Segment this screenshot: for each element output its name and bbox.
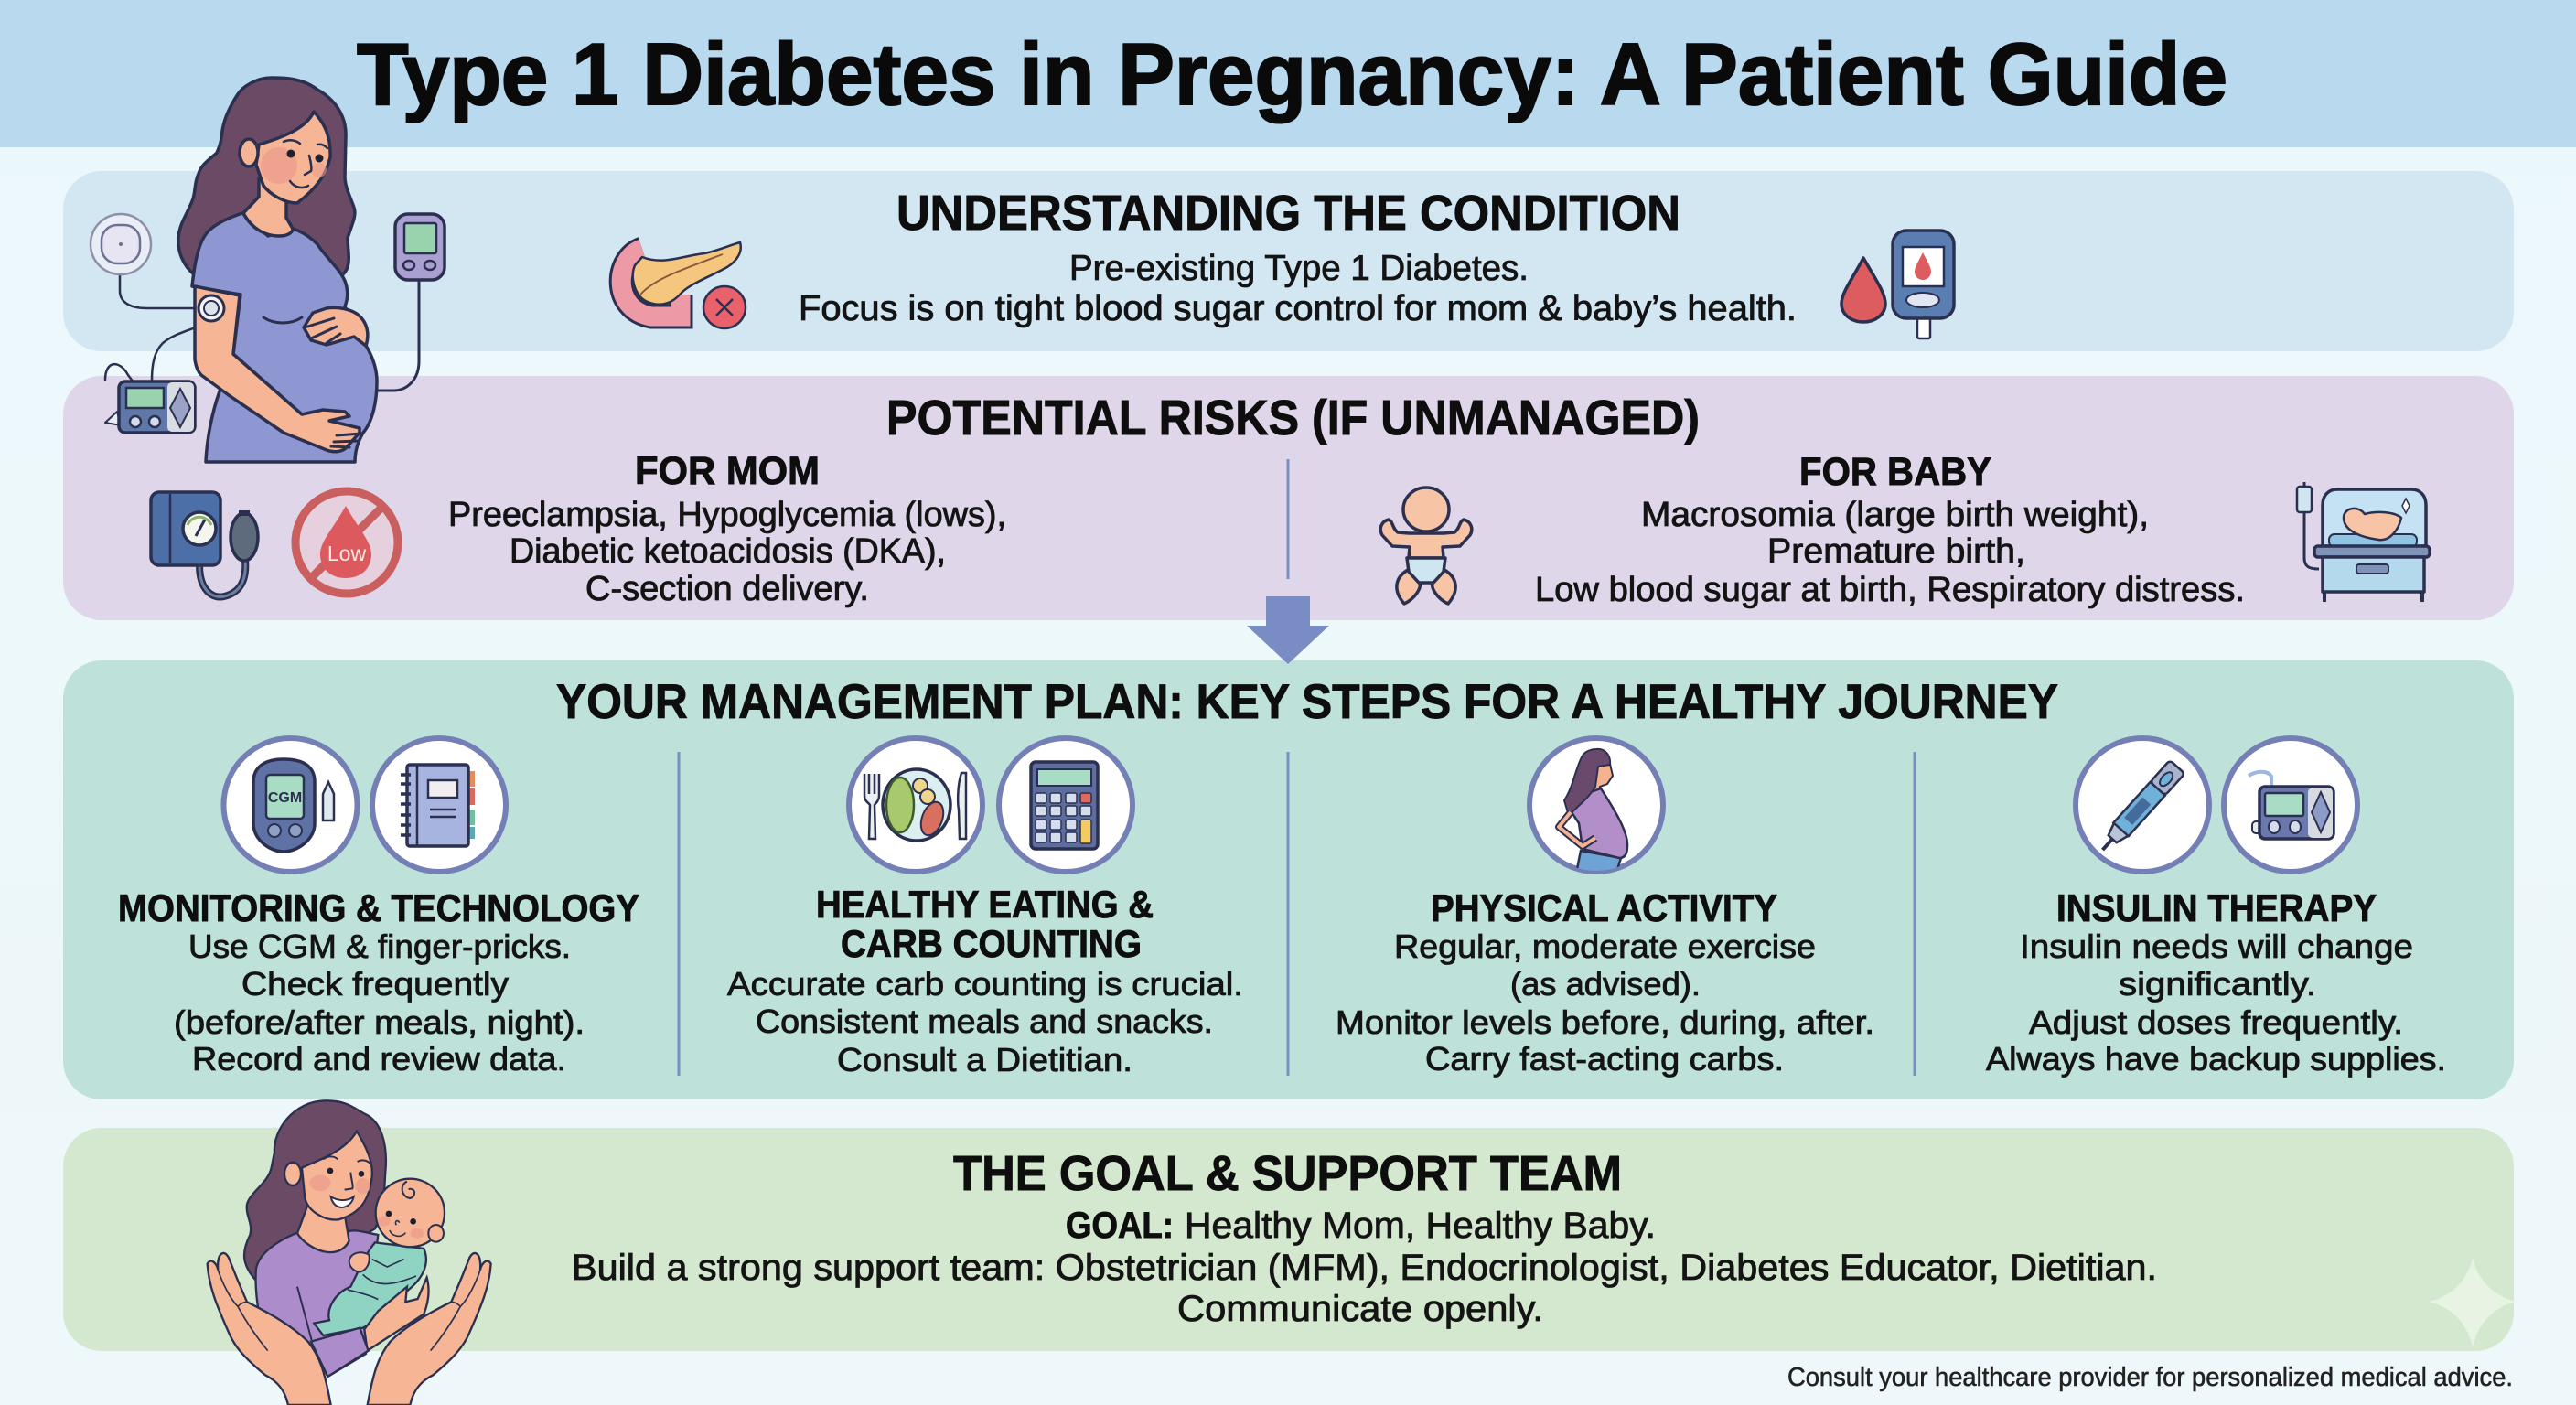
column: healthy eating and carb counting (727, 883, 1243, 1078)
arm sensor (199, 295, 224, 321)
baby body (314, 1242, 426, 1335)
column: healthy eating and carb counting: Consult a Dietitian. (837, 1041, 1132, 1078)
text: goal and team: GOAL: (1066, 1206, 1174, 1246)
mother forearm (364, 1278, 429, 1351)
icon: logbook (372, 738, 506, 872)
baby head (376, 1179, 445, 1247)
left supporting hand (208, 1253, 331, 1405)
icon label: CGM: CGM (268, 790, 302, 806)
icon: insulin pen (2076, 738, 2209, 872)
mother hair (244, 1100, 386, 1281)
text: goal and team (572, 1206, 2157, 1329)
text: goal and team: Build a strong support team: Obstetrician (MFM), Endocrinologist, Diabetes Educator, Dietitian. (572, 1248, 2157, 1288)
mother face (284, 1132, 372, 1219)
device: round sensor (91, 214, 208, 381)
heading: management plan: YOUR MANAGEMENT PLAN: KEY STEPS FOR A HEALTHY JOURNEY (556, 675, 2058, 729)
column: physical activity: Regular, moderate exercise (1394, 928, 1816, 965)
baby hand (349, 1252, 370, 1272)
column: monitoring and technology (118, 886, 639, 1078)
column: physical activity (1336, 886, 1874, 1078)
icon: baby (1380, 488, 1472, 604)
text: risks for baby: Premature birth, (1767, 532, 2025, 571)
column: physical activity: PHYSICAL ACTIVITY (1431, 886, 1777, 929)
illustration: pregnant woman with devices (91, 78, 445, 462)
subheading: for mom: FOR MOM (635, 449, 820, 493)
illustration: mother with baby held by hands (208, 1100, 491, 1405)
text: risks for mom (448, 496, 1006, 608)
mother sweater (256, 1230, 378, 1377)
panel: goal and support team (63, 1128, 2516, 1351)
icon: pregnant woman exercising (1530, 738, 1663, 878)
header band (0, 0, 2576, 147)
column: monitoring and technology: Use CGM & finger-pricks. (188, 928, 571, 965)
icon: incubator (2297, 482, 2430, 602)
text: risks for mom: Diabetic ketoacidosis (DKA), (510, 532, 946, 571)
panel: management plan (63, 660, 2514, 1099)
text: goal and team: Healthy Mom, Healthy Baby. (1185, 1206, 1656, 1246)
sweater cuff (311, 1328, 369, 1377)
icon label: Low: Low (327, 542, 366, 565)
panel: understanding the condition (63, 171, 2514, 351)
column: insulin therapy: significantly. (2119, 965, 2316, 1003)
chest line (263, 317, 302, 323)
neck and face (240, 112, 330, 236)
icon: insulin pump (2224, 738, 2357, 872)
column: monitoring and technology: MONITORING & TECHNOLOGY (118, 886, 639, 929)
icon: no low blood sugar (295, 491, 398, 594)
text: condition summary: Focus is on tight blood sugar control for mom & baby’s health. (799, 289, 1797, 328)
column: healthy eating and carb counting: CARB COUNTING (841, 922, 1142, 965)
subheading: for baby: FOR BABY (1799, 450, 1991, 494)
heading: understanding: UNDERSTANDING THE CONDITION (896, 186, 1680, 241)
arm and lower hand (195, 286, 360, 452)
heading: goal and support team: THE GOAL & SUPPORT TEAM (953, 1146, 1622, 1201)
mother neck (297, 1205, 349, 1252)
icon: CGM meter (223, 738, 357, 872)
icon: sparkle (2430, 1259, 2516, 1346)
panel: potential risks (63, 376, 2514, 620)
text: condition summary: Pre-existing Type 1 Diabetes. (1069, 249, 1529, 288)
footer note: Consult your healthcare provider for personalized medical advice. (1787, 1363, 2513, 1392)
column: physical activity: Monitor levels before, during, after. (1336, 1003, 1874, 1041)
device: handheld reader (378, 214, 445, 391)
text: risks for baby (1535, 496, 2245, 609)
text: risks for baby: Macrosomia (large birth weight), (1641, 496, 2149, 534)
title: Type 1 Diabetes in Pregnancy: A Patient Guide (357, 26, 2227, 123)
icon: pancreas with X (621, 242, 746, 328)
column: insulin therapy (1986, 886, 2446, 1078)
icon: blood pressure cuff (151, 492, 258, 597)
column: monitoring and technology: Check frequently (242, 965, 509, 1003)
column: physical activity: Carry fast-acting carbs. (1425, 1040, 1784, 1078)
column: insulin therapy: Adjust doses frequently. (2029, 1003, 2403, 1041)
text: goal and team: Communicate openly. (1177, 1289, 1543, 1329)
text: risks for mom: Preeclampsia, Hypoglycemia (lows), (448, 496, 1006, 534)
column: insulin therapy: Insulin needs will change (2020, 928, 2413, 965)
column: insulin therapy: INSULIN THERAPY (2056, 886, 2377, 929)
column: healthy eating and carb counting: HEALTHY EATING & (816, 883, 1154, 926)
column: insulin therapy: Always have backup supplies. (1986, 1040, 2446, 1078)
text: risks for baby: Low blood sugar at birth, Respiratory distress. (1535, 571, 2245, 609)
icon: blood drop and glucose meter (1841, 231, 1954, 338)
hair (178, 78, 355, 274)
dress (192, 213, 377, 462)
column: monitoring and technology: Record and review data. (192, 1040, 566, 1078)
device: insulin pump (105, 364, 195, 433)
icon: plate with cutlery (849, 738, 982, 872)
text: risks for mom: C-section delivery. (585, 570, 869, 608)
arrow: risks to management plan (1247, 596, 1329, 664)
icon: calculator (999, 738, 1132, 872)
column: monitoring and technology: (before/after meals, night). (174, 1003, 585, 1041)
upper hand on belly (304, 307, 368, 346)
column: physical activity: (as advised). (1510, 965, 1701, 1003)
right supporting hand (368, 1253, 491, 1405)
column: healthy eating and carb counting: Accurate carb counting is crucial. (727, 965, 1243, 1003)
column: healthy eating and carb counting: Consistent meals and snacks. (756, 1003, 1213, 1040)
heading: potential risks: POTENTIAL RISKS (IF UNMANAGED) (886, 391, 1700, 445)
text: condition summary (799, 249, 1797, 328)
